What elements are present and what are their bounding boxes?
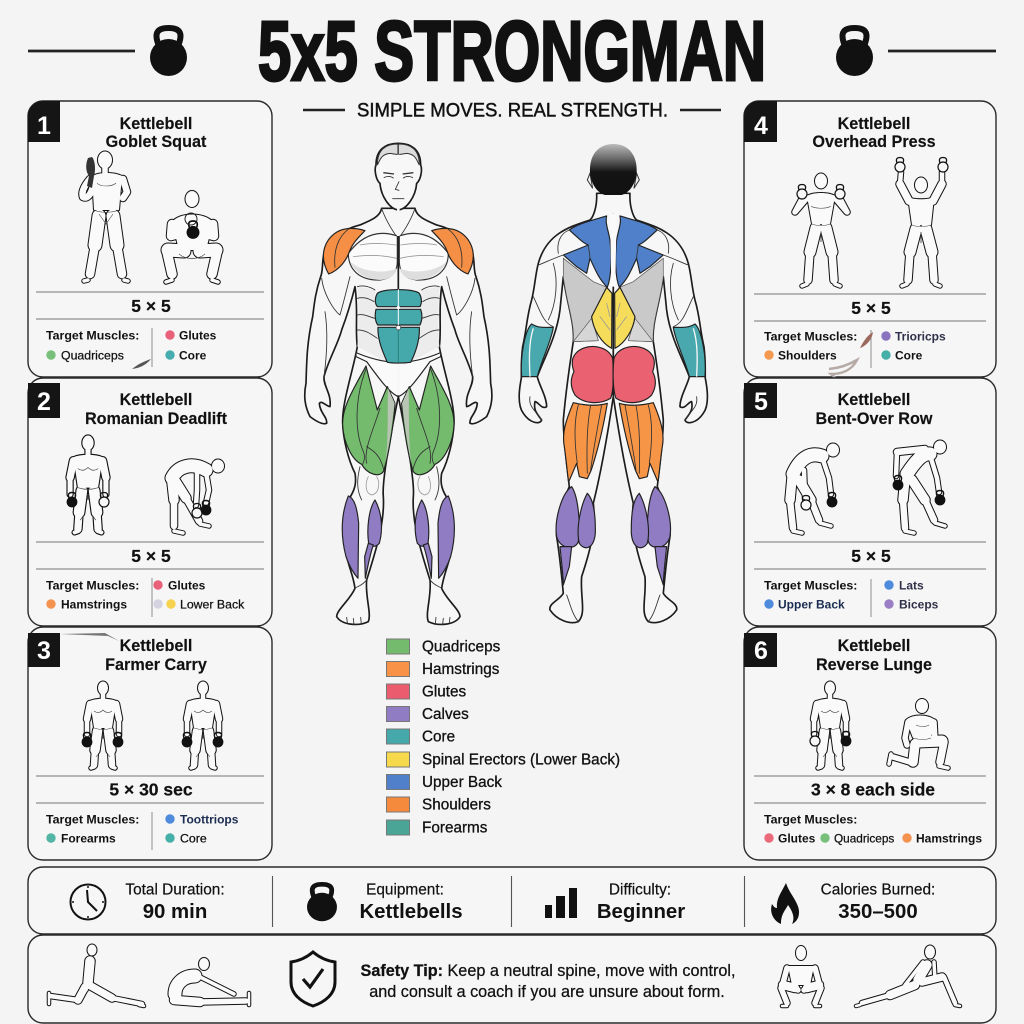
figure: standing start — [810, 682, 851, 768]
target muscles: Biceps — [899, 598, 939, 612]
figure: press overhead — [895, 158, 948, 286]
target muscles — [764, 330, 946, 385]
target muscles — [46, 328, 217, 369]
target muscles: Target Muscles: — [46, 812, 139, 826]
stretch: side lunge reach — [856, 946, 960, 1006]
anatomy diagram — [305, 143, 707, 625]
target muscles — [764, 578, 939, 617]
panel: exercise 1 goblet squat — [28, 101, 272, 377]
front body figure — [305, 143, 492, 625]
stretch: seated toe touch — [174, 958, 249, 1005]
legend: Hamstrings — [422, 661, 500, 678]
stat: duration — [70, 882, 225, 923]
head back with hair — [587, 144, 639, 287]
title: 5x5 STRONGMAN — [258, 4, 766, 98]
badge 3: 3 — [37, 637, 51, 665]
panel: exercise 3 farmer carry — [28, 627, 272, 860]
legend: Shoulders — [422, 796, 491, 814]
stat: equipment — [307, 882, 463, 923]
panel: exercise 2 romanian deadlift: Romanian Deadlift — [85, 410, 228, 428]
target muscles: Glutes — [179, 328, 217, 342]
panel: exercise 6 reverse lunge — [744, 627, 996, 860]
stat: calories — [771, 882, 935, 924]
target muscles — [764, 812, 982, 846]
stat: calories: 350–500 — [838, 901, 918, 923]
target muscles: Quadriceps — [834, 832, 894, 846]
safety tip text: and consult a coach if you are unsure about form. — [369, 983, 725, 1001]
sets and reps: 5 × 5 — [131, 546, 171, 566]
icon: kettlebell right — [836, 28, 873, 76]
legend: Calves — [422, 706, 469, 723]
figure: bent-over start — [790, 444, 839, 533]
legend: Core — [422, 728, 455, 746]
target muscles: Target Muscles: — [764, 578, 857, 592]
target muscles: Glutes — [168, 578, 206, 592]
header — [28, 4, 996, 122]
legend: Spinal Erectors (Lower Back) — [422, 752, 620, 768]
target muscles: Hamstrings — [916, 832, 982, 846]
figure: rack position — [795, 174, 847, 286]
back left half — [519, 193, 613, 623]
stat: equipment: Kettlebells — [359, 901, 463, 923]
badge 1 — [28, 101, 60, 142]
badge 6 — [744, 633, 777, 667]
target muscles — [46, 578, 245, 617]
target muscles: Target Muscles: — [46, 328, 139, 342]
panel: exercise 5 bent-over row — [744, 378, 996, 626]
panel: exercise 2 romanian deadlift — [28, 378, 272, 626]
sets and reps: 3 × 8 each side — [811, 780, 935, 800]
badge 1: 1 — [37, 112, 51, 140]
figure: farmer carry front — [82, 682, 123, 768]
face centre details — [393, 155, 404, 395]
badge 2 — [28, 383, 60, 418]
target muscles: Target Muscles: — [764, 330, 857, 344]
heading: Kettlebell — [838, 115, 910, 133]
target muscles: Forearms — [61, 832, 116, 846]
panel: exercise 6 reverse lunge: Reverse Lunge — [816, 656, 932, 674]
panel: exercise 4 overhead press — [744, 101, 996, 385]
target muscles: Hamstrings — [61, 598, 127, 612]
target muscles: Core — [895, 348, 923, 362]
safety tip text — [361, 962, 735, 1001]
stat: difficulty: Difficulty: — [609, 882, 671, 898]
stat: difficulty — [545, 882, 685, 923]
figure: standing goblet start — [82, 152, 128, 281]
figure: lunge — [889, 699, 948, 768]
panel: stats bar — [28, 867, 996, 934]
badge 3 — [28, 633, 60, 667]
heading: Kettlebell — [838, 391, 910, 409]
target muscles: Quadriceps — [61, 348, 124, 362]
badge 2: 2 — [37, 388, 51, 416]
legend — [386, 638, 620, 836]
core muscles — [375, 289, 422, 363]
sets and reps: 5 × 5 — [131, 296, 171, 316]
badge 4 — [744, 101, 777, 142]
panel: exercise 1 goblet squat: Goblet Squat — [106, 133, 207, 151]
stretch: side lunge — [49, 944, 144, 1006]
figure: farmer carry walking — [182, 682, 223, 768]
back body figure — [519, 144, 707, 623]
badge 5 — [744, 383, 777, 418]
sets and reps: 5 × 5 — [851, 298, 891, 318]
stat: calories: Calories Burned: — [821, 882, 935, 898]
stat: duration: Total Duration: — [125, 882, 225, 898]
sets and reps: 5 × 30 sec — [109, 780, 193, 800]
sets and reps: 5 × 5 — [851, 546, 891, 566]
panel: exercise 3 farmer carry: Farmer Carry — [105, 656, 207, 674]
legend: Quadriceps — [422, 638, 501, 656]
target muscles: Core — [179, 348, 207, 362]
target muscles: Shoulders — [778, 348, 837, 362]
target muscles: Toottriops — [180, 812, 239, 826]
heading: Kettlebell — [120, 391, 192, 409]
figure: bent-over pull — [893, 440, 946, 533]
heading: Kettlebell — [120, 637, 192, 655]
heading: Kettlebell — [838, 637, 910, 655]
target muscles: Lats — [899, 578, 924, 592]
target muscles: Glutes — [778, 832, 816, 846]
panel: exercise 5 bent-over row: Bent-Over Row — [816, 410, 933, 428]
stretch: deep squat — [781, 946, 821, 1006]
legend: Glutes — [422, 684, 467, 700]
panel: safety tip — [28, 935, 996, 1023]
front left half — [305, 143, 398, 625]
safety tip text: Safety Tip: Keep a neutral spine, move with control, — [361, 962, 735, 980]
target muscles: Upper Back — [778, 598, 845, 612]
legend: Forearms — [422, 820, 488, 836]
target muscles: Lower Back — [180, 598, 245, 612]
target muscles: Core — [180, 832, 207, 846]
heading: Kettlebell — [120, 115, 192, 133]
badge 4: 4 — [754, 112, 768, 140]
figure: standing with kettlebells — [67, 436, 109, 532]
icon: kettlebell left — [150, 28, 187, 76]
figure: squat bottom — [166, 191, 218, 282]
panel: exercise 4 overhead press: Overhead Press — [812, 133, 936, 151]
legend: Upper Back — [422, 774, 502, 791]
stat: duration: 90 min — [143, 901, 207, 923]
icon: safety shield — [291, 952, 335, 1006]
badge 6: 6 — [754, 637, 768, 665]
subtitle: SIMPLE MOVES. REAL STRENGTH. — [357, 100, 668, 122]
stat: equipment: Equipment: — [366, 882, 444, 898]
figure: hinge position — [172, 460, 224, 533]
target muscles: Target Muscles: — [46, 578, 139, 592]
target muscles — [46, 812, 239, 850]
target muscles: Target Muscles: — [764, 812, 857, 826]
target muscles: Trioricps — [895, 330, 946, 344]
badge 5: 5 — [754, 388, 768, 416]
stat: difficulty: Beginner — [597, 901, 685, 923]
